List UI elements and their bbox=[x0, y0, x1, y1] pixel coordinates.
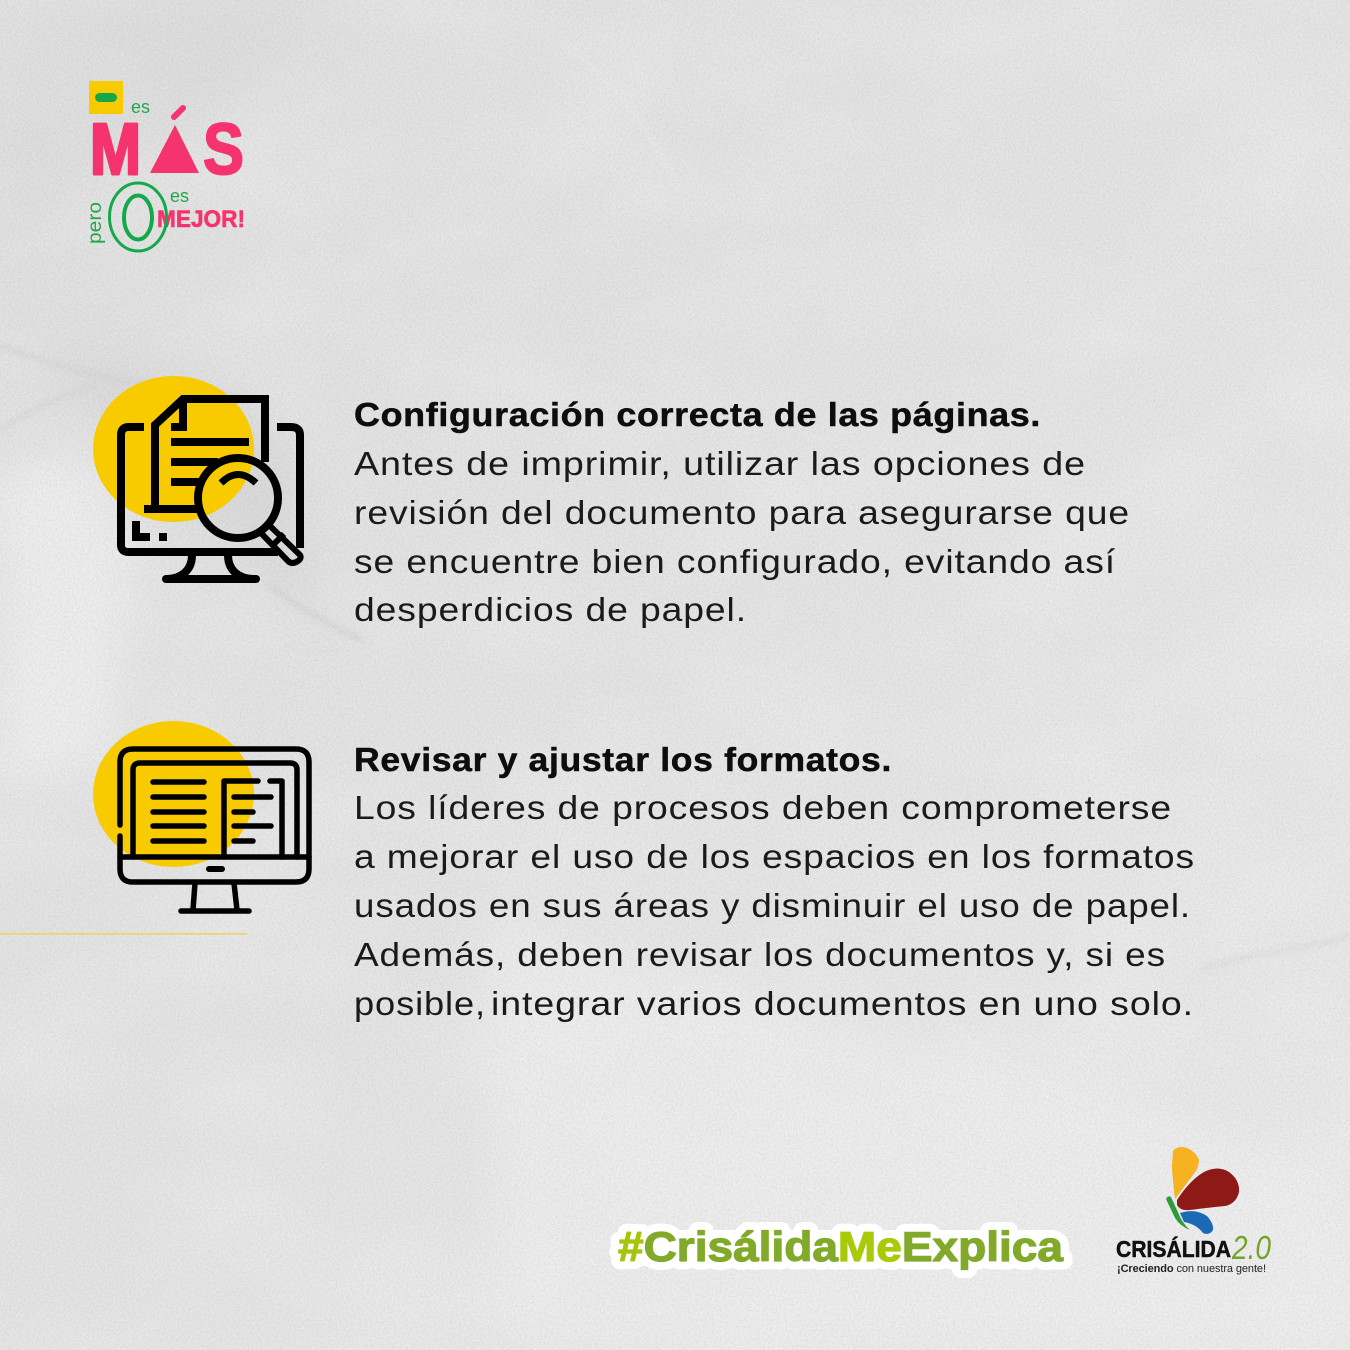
campaign logo: es MÁS pero 0 es MEJOR bbox=[85, 81, 245, 251]
text block: formats bbox=[354, 741, 1195, 1022]
version number: 2.0 bbox=[1231, 1229, 1272, 1266]
paragraph: page setup: Antes de imprimir, utilizar las opciones de bbox=[354, 445, 1086, 482]
paragraph: formats: integrar varios documentos en uno solo. bbox=[491, 985, 1194, 1022]
paragraph: formats: posible, bbox=[354, 985, 486, 1022]
paragraph: formats: usados en sus áreas y disminuir el uso de papel. bbox=[354, 887, 1191, 924]
paragraph: page setup: se encuentre bien configurado, evitando así bbox=[354, 543, 1116, 580]
tagline: ¡Creciendo con nuestra gente! bbox=[1117, 1263, 1266, 1275]
icon: monitor with document and magnifier bbox=[93, 376, 301, 579]
word: es (second): es bbox=[170, 186, 189, 206]
word: pero: pero bbox=[85, 202, 106, 244]
numeral zero in green rings bbox=[110, 183, 166, 251]
paragraph: formats: Además, deben revisar los documentos y, si es bbox=[354, 936, 1166, 973]
paragraph: formats: Los líderes de procesos deben comprometerse bbox=[354, 789, 1172, 826]
paragraph: page setup: revisión del documento para asegurarse que bbox=[354, 494, 1130, 531]
paragraph: page setup bbox=[354, 445, 1130, 628]
paragraph: page setup: desperdicios de papel. bbox=[354, 591, 747, 628]
icon: butterfly bbox=[1166, 1147, 1239, 1234]
paragraph: formats: a mejorar el uso de los espacios en los formatos bbox=[354, 838, 1195, 875]
heading: formats: Revisar y ajustar los formatos. bbox=[354, 741, 892, 778]
heading: page setup: Configuración correcta de las páginas. bbox=[354, 396, 1041, 433]
Crisálida 2.0 logo bbox=[1116, 1147, 1272, 1275]
icon: yellow square with green pill bbox=[89, 81, 123, 114]
word: MÁS: M bbox=[90, 110, 141, 190]
word: MÁS: S bbox=[203, 110, 244, 190]
accent rule bbox=[0, 933, 247, 935]
text block: page setup bbox=[354, 396, 1130, 628]
word: MEJOR: MEJOR! bbox=[157, 206, 245, 233]
paragraph: formats bbox=[354, 789, 1195, 1022]
word: MÁS bbox=[90, 108, 244, 190]
wordmark: CRISÁLIDA bbox=[1116, 1235, 1231, 1262]
hashtag: #Crisálida MeExplica bbox=[618, 1223, 1064, 1270]
icon: monitor with formats bbox=[93, 721, 309, 911]
hashtag: #CrisálidaMeExplica bbox=[618, 1223, 1064, 1270]
word: es: es bbox=[131, 97, 150, 117]
